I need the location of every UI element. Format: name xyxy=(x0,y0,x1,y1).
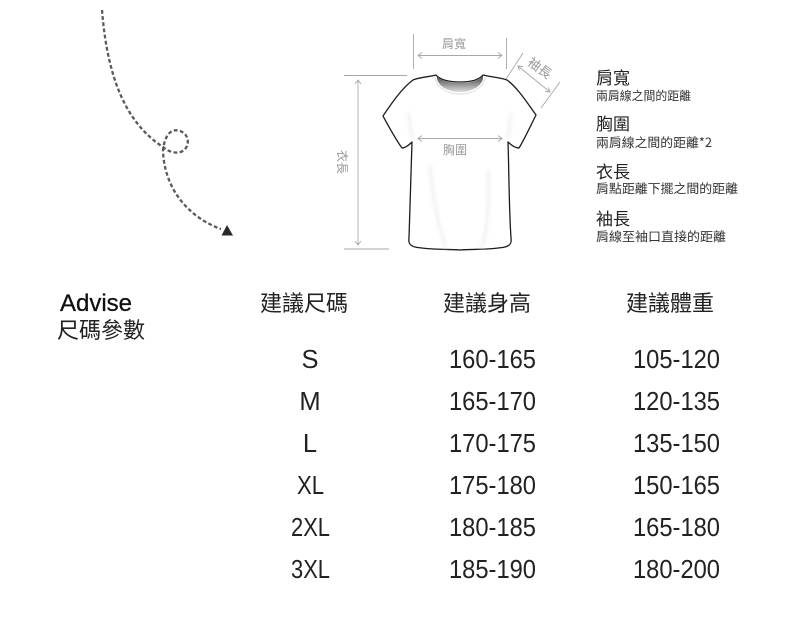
heading: advise xyxy=(57,290,145,345)
row L: 170-175 xyxy=(449,430,536,458)
row 3XL: 3XL xyxy=(291,556,330,584)
legend: chest: 胸圍 xyxy=(596,110,630,135)
row L: 135-150 xyxy=(633,430,720,458)
row M: 120-135 xyxy=(633,388,720,416)
legend: body length xyxy=(596,158,738,197)
row L: L xyxy=(303,430,317,458)
table header: 建議尺碼 xyxy=(260,286,348,318)
label: chest: 胸圍 xyxy=(443,141,467,158)
row S: S xyxy=(301,346,319,374)
shoulder width measure xyxy=(414,34,506,69)
label: shoulder width: 肩寬 xyxy=(442,35,466,52)
legend: sleeve length: 肩線至袖口直接的距離 xyxy=(596,226,726,245)
size table xyxy=(260,286,720,584)
row L xyxy=(303,430,720,458)
legend: body length: 肩點距離下擺之間的距離 xyxy=(596,178,738,197)
row XL: XL xyxy=(297,472,324,500)
row XL: 175-180 xyxy=(449,472,536,500)
heading: advise: 尺碼參數 xyxy=(57,313,145,345)
t-shirt diagram xyxy=(334,34,560,250)
label: sleeve length: 袖長 xyxy=(524,52,556,83)
legend: sleeve length: 袖長 xyxy=(596,205,630,230)
legend: shoulder width: 肩寬 xyxy=(596,64,630,89)
row M: 165-170 xyxy=(449,388,536,416)
row 3XL xyxy=(291,556,720,584)
row M xyxy=(299,388,720,416)
sleeve length measure xyxy=(506,53,560,108)
legend: shoulder width: 兩肩線之間的距離 xyxy=(596,87,691,104)
collar rim xyxy=(435,76,485,94)
chest measure xyxy=(418,136,502,142)
row 2XL xyxy=(291,514,720,542)
legend: chest: 兩肩線之間的距離*2 xyxy=(596,132,712,151)
legend: chest xyxy=(596,110,712,151)
row XL: 150-165 xyxy=(633,472,720,500)
legend: sleeve length xyxy=(596,205,726,245)
row XL xyxy=(297,472,720,500)
row S: 105-120 xyxy=(633,346,720,374)
body length measure xyxy=(344,76,407,249)
row 3XL: 185-190 xyxy=(449,556,536,584)
table header xyxy=(260,286,714,318)
table header: 建議身高 xyxy=(443,286,531,318)
row 3XL: 180-200 xyxy=(633,556,720,584)
collar shading xyxy=(437,76,483,92)
t-shirt body xyxy=(383,75,536,250)
table header: 建議體重 xyxy=(626,286,714,318)
row S xyxy=(301,346,720,374)
row M: M xyxy=(299,388,321,416)
row 2XL: 2XL xyxy=(291,514,330,542)
heading: advise: Advise xyxy=(60,290,132,317)
row 2XL: 180-185 xyxy=(449,514,536,542)
row S: 160-165 xyxy=(449,346,536,374)
legend: shoulder width xyxy=(596,64,691,104)
arrow head xyxy=(222,225,233,236)
label: body length: 衣長 xyxy=(334,150,351,174)
fabric folds xyxy=(408,112,511,248)
row 2XL: 165-180 xyxy=(633,514,720,542)
dashed arrow decoration xyxy=(102,10,233,236)
legend: body length: 衣長 xyxy=(596,158,630,183)
